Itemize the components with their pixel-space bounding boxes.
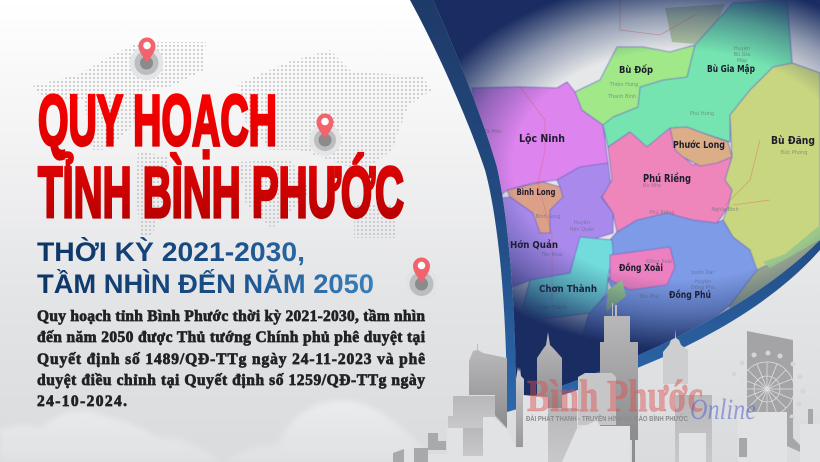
map: district labels: Bình Long [516, 188, 556, 198]
clouds [0, 401, 432, 462]
panel: province map [430, 0, 820, 420]
body text: duyệt điều chỉnh tại Quyết định số 1259/QĐ-TTg ngày [37, 372, 425, 389]
map: district labels: Đồng Phú [669, 290, 711, 301]
building: mid gray columns [548, 408, 577, 462]
map: district labels: Bù Đốp [619, 65, 653, 76]
district: Đồng Xoài [610, 247, 675, 290]
map: small place names: Bù Nho [643, 182, 661, 189]
map: small place names [483, 45, 807, 311]
body text: đến năm 2050 được Thủ tướng Chính phủ phê duyệt tại [37, 329, 426, 346]
building: left tower [469, 344, 507, 428]
district: Phước Long [670, 127, 732, 166]
district: Bù Đăng [723, 63, 820, 270]
body text: Quyết định số 1489/QĐ-TTg ngày 24-11-2023 và phê [37, 351, 425, 368]
map: small place names: Bình Long [536, 213, 560, 220]
map: small place names: buôn Dar [691, 269, 716, 276]
building: slim antenna tower [516, 367, 524, 447]
district: Bù Đốp [575, 45, 695, 125]
district: Bù Gia Mập [603, 0, 792, 147]
map: small place names: Huyện [695, 278, 711, 285]
map: south-eastern land [728, 240, 820, 308]
map: small place names: Mập [737, 57, 747, 64]
map: district labels: Bù Đăng [771, 135, 815, 147]
district: Bình Long [507, 182, 563, 233]
map: small place names: Thanh Bình [607, 93, 636, 100]
map: small place names: Huyện [574, 219, 590, 226]
icon: location pin 2 [309, 114, 341, 156]
subtitle [37, 237, 374, 299]
watermark: Bình Phước Online [526, 371, 756, 426]
subtitle line 2: TẦM NHÌN ĐẾN NĂM 2050 [37, 269, 374, 299]
building: tallest tower [600, 303, 638, 440]
map: district labels: Đồng Xoài [619, 263, 663, 274]
map: small place names: Chơn Thành [537, 304, 567, 311]
building: lower left block [448, 396, 507, 428]
map: district labels: Bù Gia Mập [707, 64, 755, 75]
billboard [747, 331, 793, 418]
building: right spire tower [663, 329, 688, 384]
district: Lộc Ninh [472, 82, 608, 200]
map: small place names: Thiện Hưng [609, 81, 638, 88]
map: district labels: Chơn Thành [539, 284, 597, 295]
district: Đồng Phú [570, 213, 758, 383]
building: left column [463, 428, 483, 456]
map: northern neighbouring land [665, 4, 725, 44]
map: district labels: Hớn Quản [510, 240, 558, 251]
map: small place names: Đồng Phú [691, 283, 715, 291]
body text: Quy hoạch tỉnh Bình Phước thời kỳ 2021-2030, tầm nhìn [37, 308, 425, 325]
icon: location pin 3 [405, 258, 438, 300]
district: Chơn Thành [523, 237, 613, 320]
map: small place names: Tân Phú [638, 293, 659, 300]
front light skyline [400, 395, 630, 462]
map: small place names: Phú Hưng [690, 110, 714, 117]
building: spire tower [537, 332, 562, 410]
dotted world map [33, 42, 432, 238]
district: Hớn Quản [502, 162, 614, 288]
map: roads [520, 0, 770, 300]
district: Phú Riềng [602, 128, 732, 232]
building: far-left small blocks [393, 433, 446, 462]
map: small place names: Bù Gia [734, 51, 750, 58]
city skyline [393, 303, 820, 462]
map: small place names: Đức Phong [781, 149, 807, 156]
building: right block [675, 395, 712, 462]
body text: 24-10-2024. [37, 393, 127, 410]
building: dark tower base [630, 425, 637, 462]
map: small place names: Đồng Xoài [646, 257, 672, 265]
building: right column fragments [739, 409, 813, 457]
map: small place names: Tân Khai [540, 251, 563, 258]
map: small place names: Nghĩa Bình [711, 206, 739, 213]
icon: location pin 1 [130, 38, 164, 80]
map: small place names: Tà Mốc [483, 128, 502, 135]
building: right front blocks [679, 412, 820, 462]
body text [37, 308, 426, 410]
title line 2: TỈNH BÌNH PHƯỚC [38, 154, 404, 233]
icon: ferris wheel [732, 350, 806, 420]
panel: map shape with blue band [410, 0, 820, 412]
map: dark vignette [430, 0, 820, 420]
map: small place names: Phú Riềng [649, 208, 675, 216]
map: small place names: Hớn Quản [570, 226, 594, 233]
map: district labels: Phú Riềng [643, 172, 691, 185]
map: small place names: Huyện [734, 45, 750, 52]
watermark name: Bình Phước [527, 371, 703, 421]
subtitle line 1: THỜI KỲ 2021-2030, [37, 237, 305, 267]
map: green park patches [606, 225, 820, 312]
building: wide mid-rise [578, 373, 616, 425]
map: district labels: Phước Long [673, 140, 725, 151]
watermark tagline: ĐÀI PHÁT THANH - TRUYỀN HÌNH VÀ BÁO BÌNH PHƯỚC [526, 413, 688, 423]
title line 1: QUY HOẠCH [38, 82, 277, 161]
title [38, 82, 404, 233]
watermark Online: Online [690, 393, 756, 426]
map: district labels: Lộc Ninh [519, 133, 565, 145]
map: district labels [510, 64, 815, 301]
